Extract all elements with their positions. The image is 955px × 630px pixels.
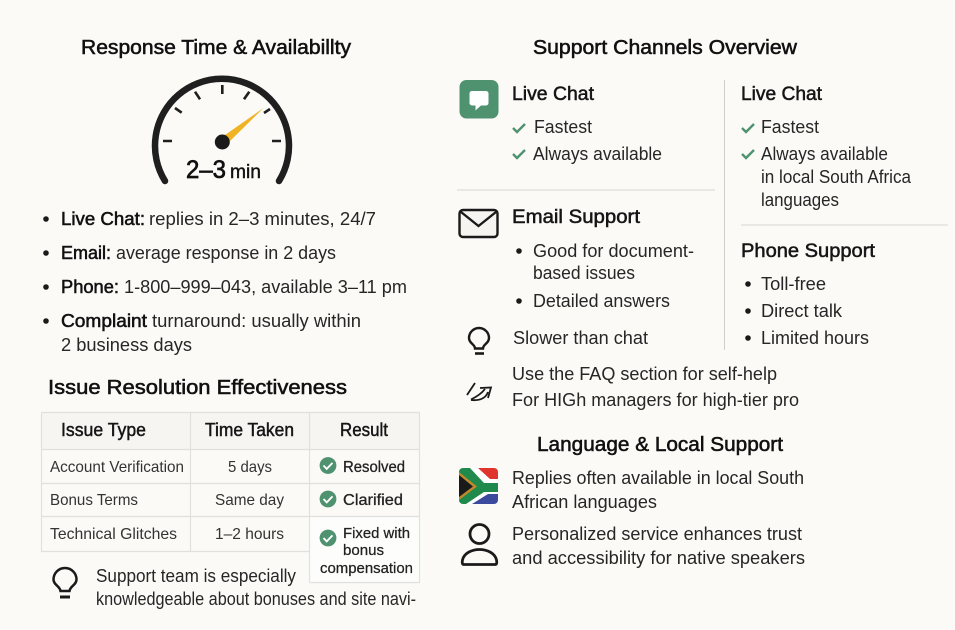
table: issue types: bonus (343, 542, 384, 559)
callout: support tip (96, 566, 416, 609)
bullet list: response details: 2 business days (61, 335, 192, 355)
table: issue types: Fixed with (343, 525, 410, 542)
icon: check clarified (320, 491, 336, 507)
icon: envelope (460, 210, 498, 237)
text: local languages (512, 468, 804, 512)
block: phone support: Direct talk (761, 301, 843, 321)
block: live chat left (512, 84, 662, 164)
text: faq and managers tip: For HIGh managers for high-tier pro (512, 390, 799, 410)
bullet list: response details: Email: (61, 243, 111, 263)
block: phone support: Toll-free (761, 274, 826, 294)
text: local languages: Replies often available in local South (512, 468, 804, 488)
callout: support tip: knowledgeable about bonuses and site navi- (96, 589, 416, 609)
block: live chat left: Always available (533, 144, 662, 164)
icon: south african flag (459, 468, 498, 504)
block: live chat right: in local South Africa (761, 167, 912, 187)
heading: support channels: Support Channels Overview (533, 37, 798, 59)
bullet list: response details: replies in 2–3 minutes, 24/7 (149, 209, 376, 229)
table: issue types (42, 412, 420, 582)
bullet list: response details: average response in 2 days (116, 243, 336, 263)
table: issue types: 5 days (228, 459, 272, 476)
block: phone support (741, 241, 876, 348)
table: issue types: Bonus Terms (50, 492, 138, 509)
block: live chat left: Fastest (534, 117, 592, 137)
heading: response time: Response Time & Availabillty (81, 37, 351, 59)
table: issue types: Clarified (343, 492, 403, 509)
text: personalized service: Personalized service enhances trust (512, 524, 802, 544)
callout: support tip: Support team is especially (96, 566, 296, 586)
block: phone support: Limited hours (761, 328, 869, 348)
heading: language support: Language & Local Support (537, 434, 783, 456)
icon: check fixed (320, 530, 336, 546)
icon: live chat (460, 80, 498, 118)
gauge: 2-3 min: min (230, 162, 261, 183)
text: personalized service: and accessibility for native speakers (512, 548, 805, 568)
block: email support: Email Support (512, 207, 641, 228)
table: issue types: Time Taken (205, 420, 294, 440)
text: slower than chat: Slower than chat (513, 328, 648, 348)
block: live chat right: Fastest (761, 117, 819, 137)
bullet list: response details: Phone: (61, 277, 119, 297)
block: phone support: Phone Support (741, 241, 876, 262)
block: live chat right: Always available (761, 144, 888, 164)
block: email support (512, 207, 694, 311)
gauge: 2-3 min: 2–3 (186, 156, 226, 184)
block: live chat right: Live Chat (741, 84, 823, 105)
panel: language and local support (459, 434, 805, 568)
icon: lightbulb (469, 328, 489, 354)
block: email support: based issues (533, 263, 635, 283)
panel: support channels overview (457, 37, 948, 410)
bullet list: response details: turnaround: usually within (152, 311, 361, 331)
table: issue types: Technical Glitches (50, 526, 177, 543)
table: issue types: Result (340, 420, 388, 440)
icon: arrow (467, 383, 491, 400)
icon: lightbulb tip (54, 568, 76, 597)
table: issue types: 1–2 hours (215, 526, 284, 543)
icon: check resolved (320, 457, 336, 474)
text: local languages: African languages (512, 492, 657, 512)
heading: issue resolution: Issue Resolution Effectiveness (48, 377, 347, 399)
text: faq and managers tip (512, 364, 799, 410)
table: issue types: Resolved (343, 459, 405, 476)
table: issue types: compensation (320, 560, 413, 577)
bullet list: response details: 1-800–999–043, available 3–11 pm (124, 277, 407, 297)
table: issue types: Account Verification (50, 459, 184, 476)
block: live chat left: Live Chat (512, 84, 595, 105)
gauge: 2-3 min (155, 79, 289, 184)
table: issue types: Issue Type (61, 420, 146, 440)
block: live chat right (741, 84, 912, 210)
bullet list: response details: Complaint (61, 311, 147, 331)
block: live chat right: languages (761, 190, 839, 210)
block: email support: Detailed answers (533, 291, 670, 311)
text: personalized service (512, 524, 805, 568)
bullet list: response details: Live Chat: (61, 209, 145, 229)
table: issue types: Same day (215, 492, 284, 509)
panel: issue resolution effectiveness (42, 377, 420, 609)
panel: response time and availability (43, 37, 407, 355)
text: faq and managers tip: Use the FAQ section for self-help (512, 364, 777, 384)
bullet list: response details (43, 209, 407, 355)
icon: person (462, 524, 497, 564)
block: email support: Good for document- (533, 241, 694, 261)
